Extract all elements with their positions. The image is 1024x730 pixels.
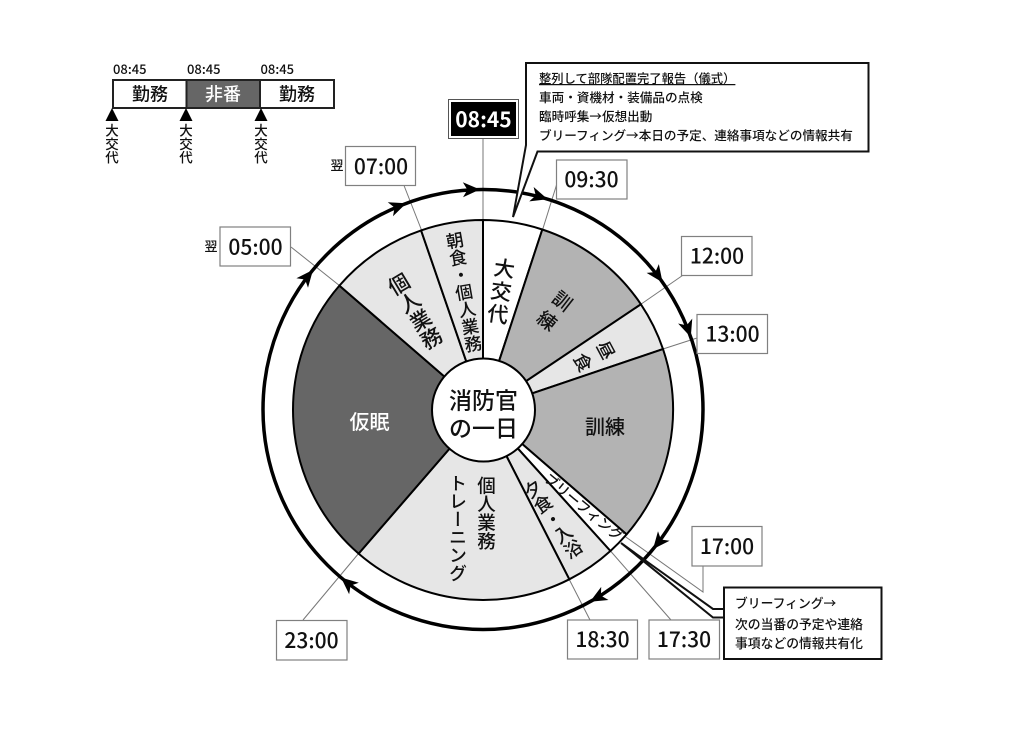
time box 23:00 [276, 620, 347, 660]
next-day mark 07:00: 翌 [330, 155, 344, 174]
callout: shift change details: 臨時呼集→仮想出動 [539, 106, 652, 125]
clockwise ring with arrows [263, 182, 703, 630]
arrowhead [296, 265, 319, 288]
time box 17:30: 17:30 [657, 624, 711, 654]
legend times: 08:45 [113, 59, 147, 78]
arrowhead [586, 587, 608, 608]
time box 05:00 [220, 227, 290, 266]
time box 07:00: 07:00 [354, 151, 408, 181]
label: dinner and bath: 夕食・入浴 [517, 474, 589, 564]
legend times: 08:45 [260, 59, 294, 78]
callout: briefing details: 次の当番の予定や連絡 [735, 614, 863, 633]
shift change marker 2: 大交代 [176, 124, 196, 166]
slice: briefing [483, 410, 627, 551]
center title: 消防官 [449, 382, 518, 416]
time box 17:30 [649, 620, 720, 659]
legend times [113, 59, 294, 78]
time box 09:30 [556, 160, 627, 199]
time box 23:00: 23:00 [284, 625, 339, 655]
callout: shift change details: 整列して部隊配置完了報告（儀式） [539, 69, 735, 87]
legend bar: off duty [186, 80, 260, 108]
time box 17:00: 17:00 [700, 531, 754, 561]
arrowhead [336, 572, 359, 594]
arrowhead [647, 264, 669, 287]
time box 07:00 [346, 146, 416, 186]
slice: training afternoon [483, 349, 673, 534]
start time 08:45 [448, 100, 518, 138]
legend bar: off duty: 非番 [205, 80, 241, 106]
next-day mark 05:00: 翌 [204, 236, 218, 255]
shift legend [102, 59, 334, 166]
time box 12:00 [682, 236, 752, 276]
slice: dinner and bath [483, 410, 610, 579]
legend bar: on duty [113, 80, 186, 108]
label: personal work and training: 個人業務 [474, 476, 500, 550]
arrowhead [529, 187, 550, 206]
callout: briefing details: ブリーフィング→ [735, 593, 837, 612]
callout: shift change details [513, 63, 868, 217]
callout: shift change details: 車両・資機材・装備品の点検 [539, 87, 703, 106]
arrowhead [647, 531, 670, 554]
slice: breakfast and personal work [421, 220, 483, 410]
slice: personal work [339, 230, 483, 410]
slice: training morning [483, 230, 641, 410]
time box 17:00 [692, 526, 762, 566]
time box 13:00 [697, 314, 768, 354]
center title: の一日 [449, 410, 518, 444]
pie chart of the day [293, 220, 673, 600]
label: training morning: 訓練 [527, 285, 579, 341]
label: lunch: 昼食 [562, 334, 620, 382]
label: breakfast and personal work: 朝食・個人業務 [441, 230, 487, 354]
slice: personal work and training [359, 410, 569, 600]
legend times: 08:45 [187, 59, 221, 78]
time box 18:30: 18:30 [575, 624, 630, 654]
time box 18:30 [568, 620, 638, 659]
label: nap: 仮眠 [350, 406, 390, 435]
leader lines [291, 138, 703, 620]
label: personal work and training: トレーニング [445, 474, 471, 582]
label: briefing: ブリーフィング [540, 469, 627, 546]
shift change marker 3: 大交代 [251, 124, 271, 166]
legend bar: on duty next [260, 80, 334, 108]
slice: lunch [483, 304, 663, 410]
callout: briefing details: 事項などの情報共有化 [735, 633, 863, 652]
callout: shift change details: ブリーフィング→本日の予定、連絡事項などの情報共有 [539, 125, 853, 144]
label: shift change: 大交代 [481, 256, 521, 328]
slice: nap [293, 286, 483, 554]
legend bar: on duty next: 勤務 [279, 80, 315, 106]
time box 13:00: 13:00 [705, 318, 760, 348]
arrowhead [463, 182, 480, 197]
slice labels [350, 230, 627, 582]
callout: briefing details [621, 543, 882, 659]
start time 08:45: 08:45 [455, 104, 512, 134]
slice: shift change [483, 220, 542, 410]
center title [432, 358, 535, 462]
legend bar: on duty: 勤務 [132, 80, 168, 106]
shift change marker 1: 大交代 [102, 124, 122, 166]
label: personal work and training [445, 474, 500, 582]
label: personal work: 個人業務 [381, 267, 450, 355]
label: training afternoon: 訓練 [585, 411, 625, 440]
time box 05:00: 05:00 [228, 232, 283, 262]
time box 12:00: 12:00 [690, 240, 744, 270]
arrowhead [388, 196, 409, 216]
arrowhead [678, 319, 698, 340]
time box 09:30: 09:30 [564, 164, 619, 194]
